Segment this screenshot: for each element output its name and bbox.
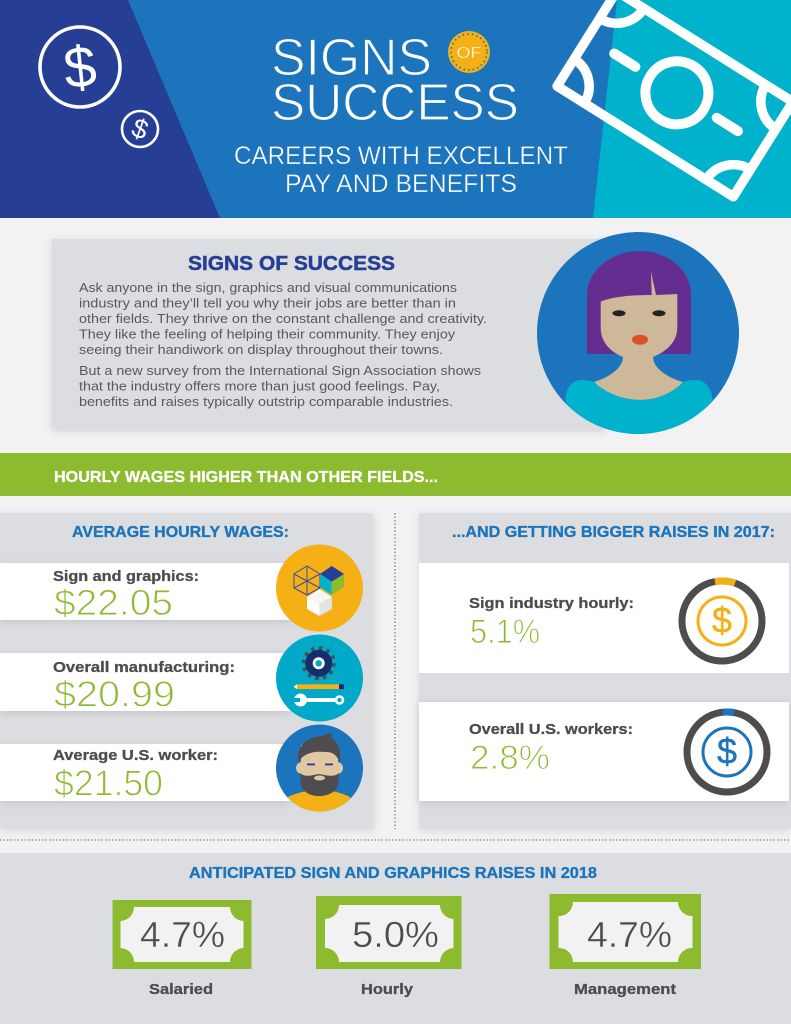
row: overall manufacturing: $20.99 [54, 674, 175, 714]
row: sign industry hourly: 5.1% [470, 613, 540, 651]
row: overall manufacturing [0, 653, 290, 714]
text block: intro paragraph two: But a new survey from the International Sign Association shows [79, 363, 482, 378]
chart: overall workers ring: $ [717, 730, 737, 772]
icon: small dollar coin: $ [128, 112, 152, 146]
text block: intro paragraph two: benefits and raises typically outstrip comparable industries. [79, 394, 453, 409]
panel: anticipated raises [0, 853, 791, 1024]
row: sign and graphics: $22.05 [54, 582, 173, 623]
bill: salaried [112, 900, 252, 969]
divider: vertical dotted [394, 513, 396, 829]
text block: intro paragraph one [79, 280, 487, 357]
row: sign industry hourly: Sign industry hourly: [469, 595, 634, 612]
title: SUCCESS [271, 74, 519, 132]
text block: intro paragraph two [79, 363, 482, 409]
heading: average hourly wages: AVERAGE HOURLY WAGES: [72, 524, 289, 541]
band: hourly wages heading [0, 453, 791, 496]
bill: management: 4.7% [587, 914, 672, 955]
row: sign and graphics: Sign and graphics: [53, 568, 199, 585]
label: management: Management [574, 981, 676, 998]
divider: horizontal dotted [0, 839, 791, 841]
row: overall us workers [419, 702, 789, 803]
icon: gear and tools [276, 634, 363, 722]
row: average us worker: Average U.S. worker: [53, 747, 218, 764]
text block: intro paragraph one: Ask anyone in the sign, graphics and visual communications [79, 280, 458, 295]
badge: of: OF [456, 45, 482, 62]
icon: large dollar coin [40, 27, 120, 107]
badge: of [448, 31, 490, 73]
heading: bigger raises: ...AND GETTING BIGGER RAISES IN 2017: [452, 524, 775, 541]
bill: management [550, 894, 701, 969]
subtitle [235, 146, 568, 192]
panel: bigger raises [419, 513, 791, 831]
chart: sign industry ring [682, 581, 762, 661]
label: hourly: Hourly [361, 981, 414, 998]
bill: salaried: 4.7% [140, 914, 225, 955]
icon: banknote outline [557, 0, 791, 197]
row: average us worker [0, 744, 290, 804]
header banner [0, 0, 791, 218]
label: salaried: Salaried [149, 981, 213, 998]
row: overall manufacturing: Overall manufacturing: [53, 659, 235, 676]
icon: woman portrait [537, 232, 739, 440]
text block: intro paragraph one: seeing their handiwork on display throughout their towns. [79, 342, 443, 357]
row: overall us workers: Overall U.S. workers: [469, 721, 633, 738]
heading: anticipated raises: ANTICIPATED SIGN AND GRAPHICS RAISES IN 2018 [189, 865, 597, 882]
icon: small dollar coin [122, 111, 158, 147]
text block: intro paragraph one: other fields. They thrive on the constant challenge and creativity. [79, 311, 487, 326]
row: sign and graphics [0, 563, 290, 623]
row: overall us workers: 2.8% [470, 739, 550, 777]
chart: sign industry ring: $ [712, 600, 732, 640]
bill: hourly: 5.0% [352, 914, 439, 955]
title: SIGNS [271, 29, 432, 87]
text block: intro paragraph two: that the industry offers more than just good feelings. Pay, [79, 378, 440, 394]
heading: signs of success: SIGNS OF SUCCESS [188, 253, 395, 275]
icon: large dollar coin: $ [61, 33, 99, 102]
row: average us worker: $21.50 [54, 762, 163, 804]
subtitle: CAREERS WITH EXCELLENT [234, 142, 568, 170]
text block: intro paragraph one: industry and they’ll tell you why their jobs are better than in [79, 296, 456, 310]
title [274, 39, 516, 120]
bill: hourly [316, 896, 462, 969]
panel: introduction [52, 239, 605, 431]
subtitle: PAY AND BENEFITS [285, 170, 517, 198]
icon: bearded man [276, 724, 363, 815]
panel: average hourly wages [0, 513, 375, 831]
text block: intro paragraph one: They like the feeling of helping their community. They enjoy [79, 326, 456, 342]
icon: cubes [276, 544, 363, 632]
band: hourly wages heading: HOURLY WAGES HIGHER THAN OTHER FIELDS... [54, 469, 438, 486]
row: sign industry hourly [419, 563, 789, 673]
chart: overall workers ring [687, 712, 767, 792]
